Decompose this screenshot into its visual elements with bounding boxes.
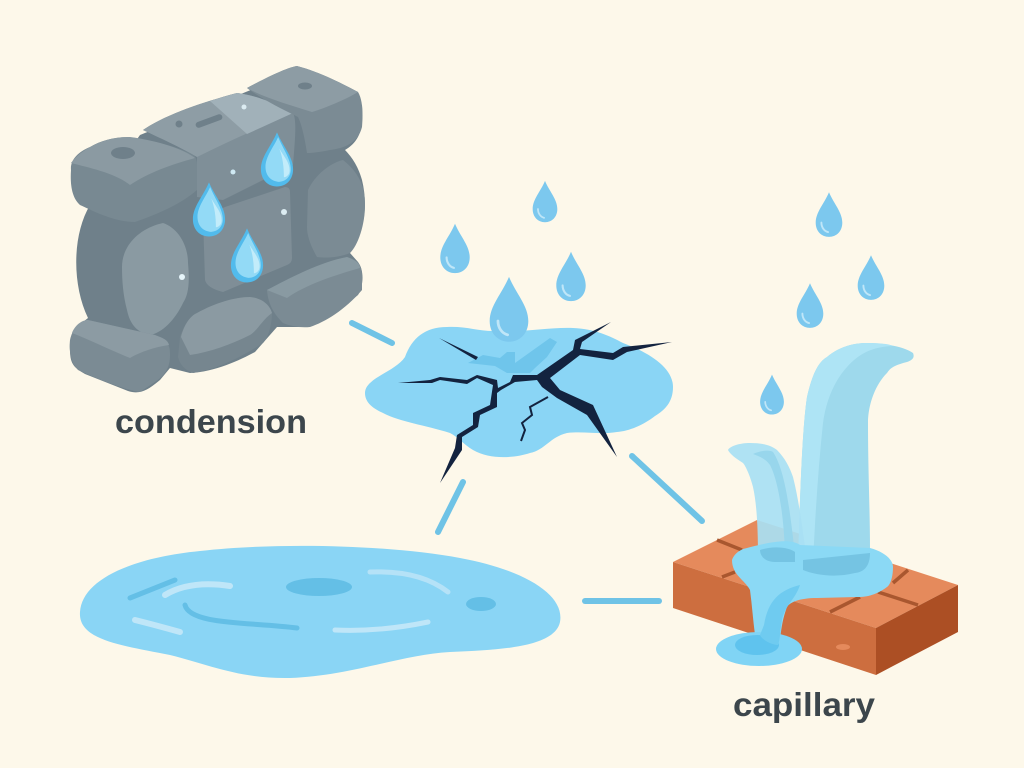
stone: left oval <box>122 223 189 335</box>
large drop landing on the puddle <box>490 277 528 342</box>
connector: puddle to brick <box>585 598 659 604</box>
stone: centre panel <box>203 187 292 292</box>
water column, short <box>728 443 807 560</box>
stone: bottom left <box>70 320 170 392</box>
stone: bottom right <box>267 257 362 327</box>
small puddle below brick <box>716 632 802 666</box>
water column, tall <box>798 343 914 570</box>
icon: brick with rising water <box>673 343 958 675</box>
stone: top centre <box>143 93 295 200</box>
icon: stone wall with condensation droplets <box>70 66 365 392</box>
connector: wall to crack <box>352 323 392 343</box>
connector: crack to puddle <box>438 482 463 532</box>
falling drops above the brick <box>760 192 884 415</box>
stone: top right <box>247 66 363 153</box>
label: condension: condension <box>115 403 307 440</box>
label: capillary: capillary <box>733 686 876 723</box>
water pool on brick <box>732 541 893 643</box>
connector: crack to brick <box>632 456 702 521</box>
stone: top left <box>71 137 197 222</box>
icon: droplet on wall, left <box>193 182 225 236</box>
stone: bottom middle <box>178 297 272 373</box>
stone: right oval <box>307 160 365 258</box>
icon: cracked puddle <box>365 277 673 483</box>
icon: large water puddle <box>80 546 560 678</box>
icon: droplet on wall, bottom <box>231 228 263 282</box>
falling drops above the crack <box>440 181 586 301</box>
icon: droplet on wall, top <box>261 132 293 186</box>
